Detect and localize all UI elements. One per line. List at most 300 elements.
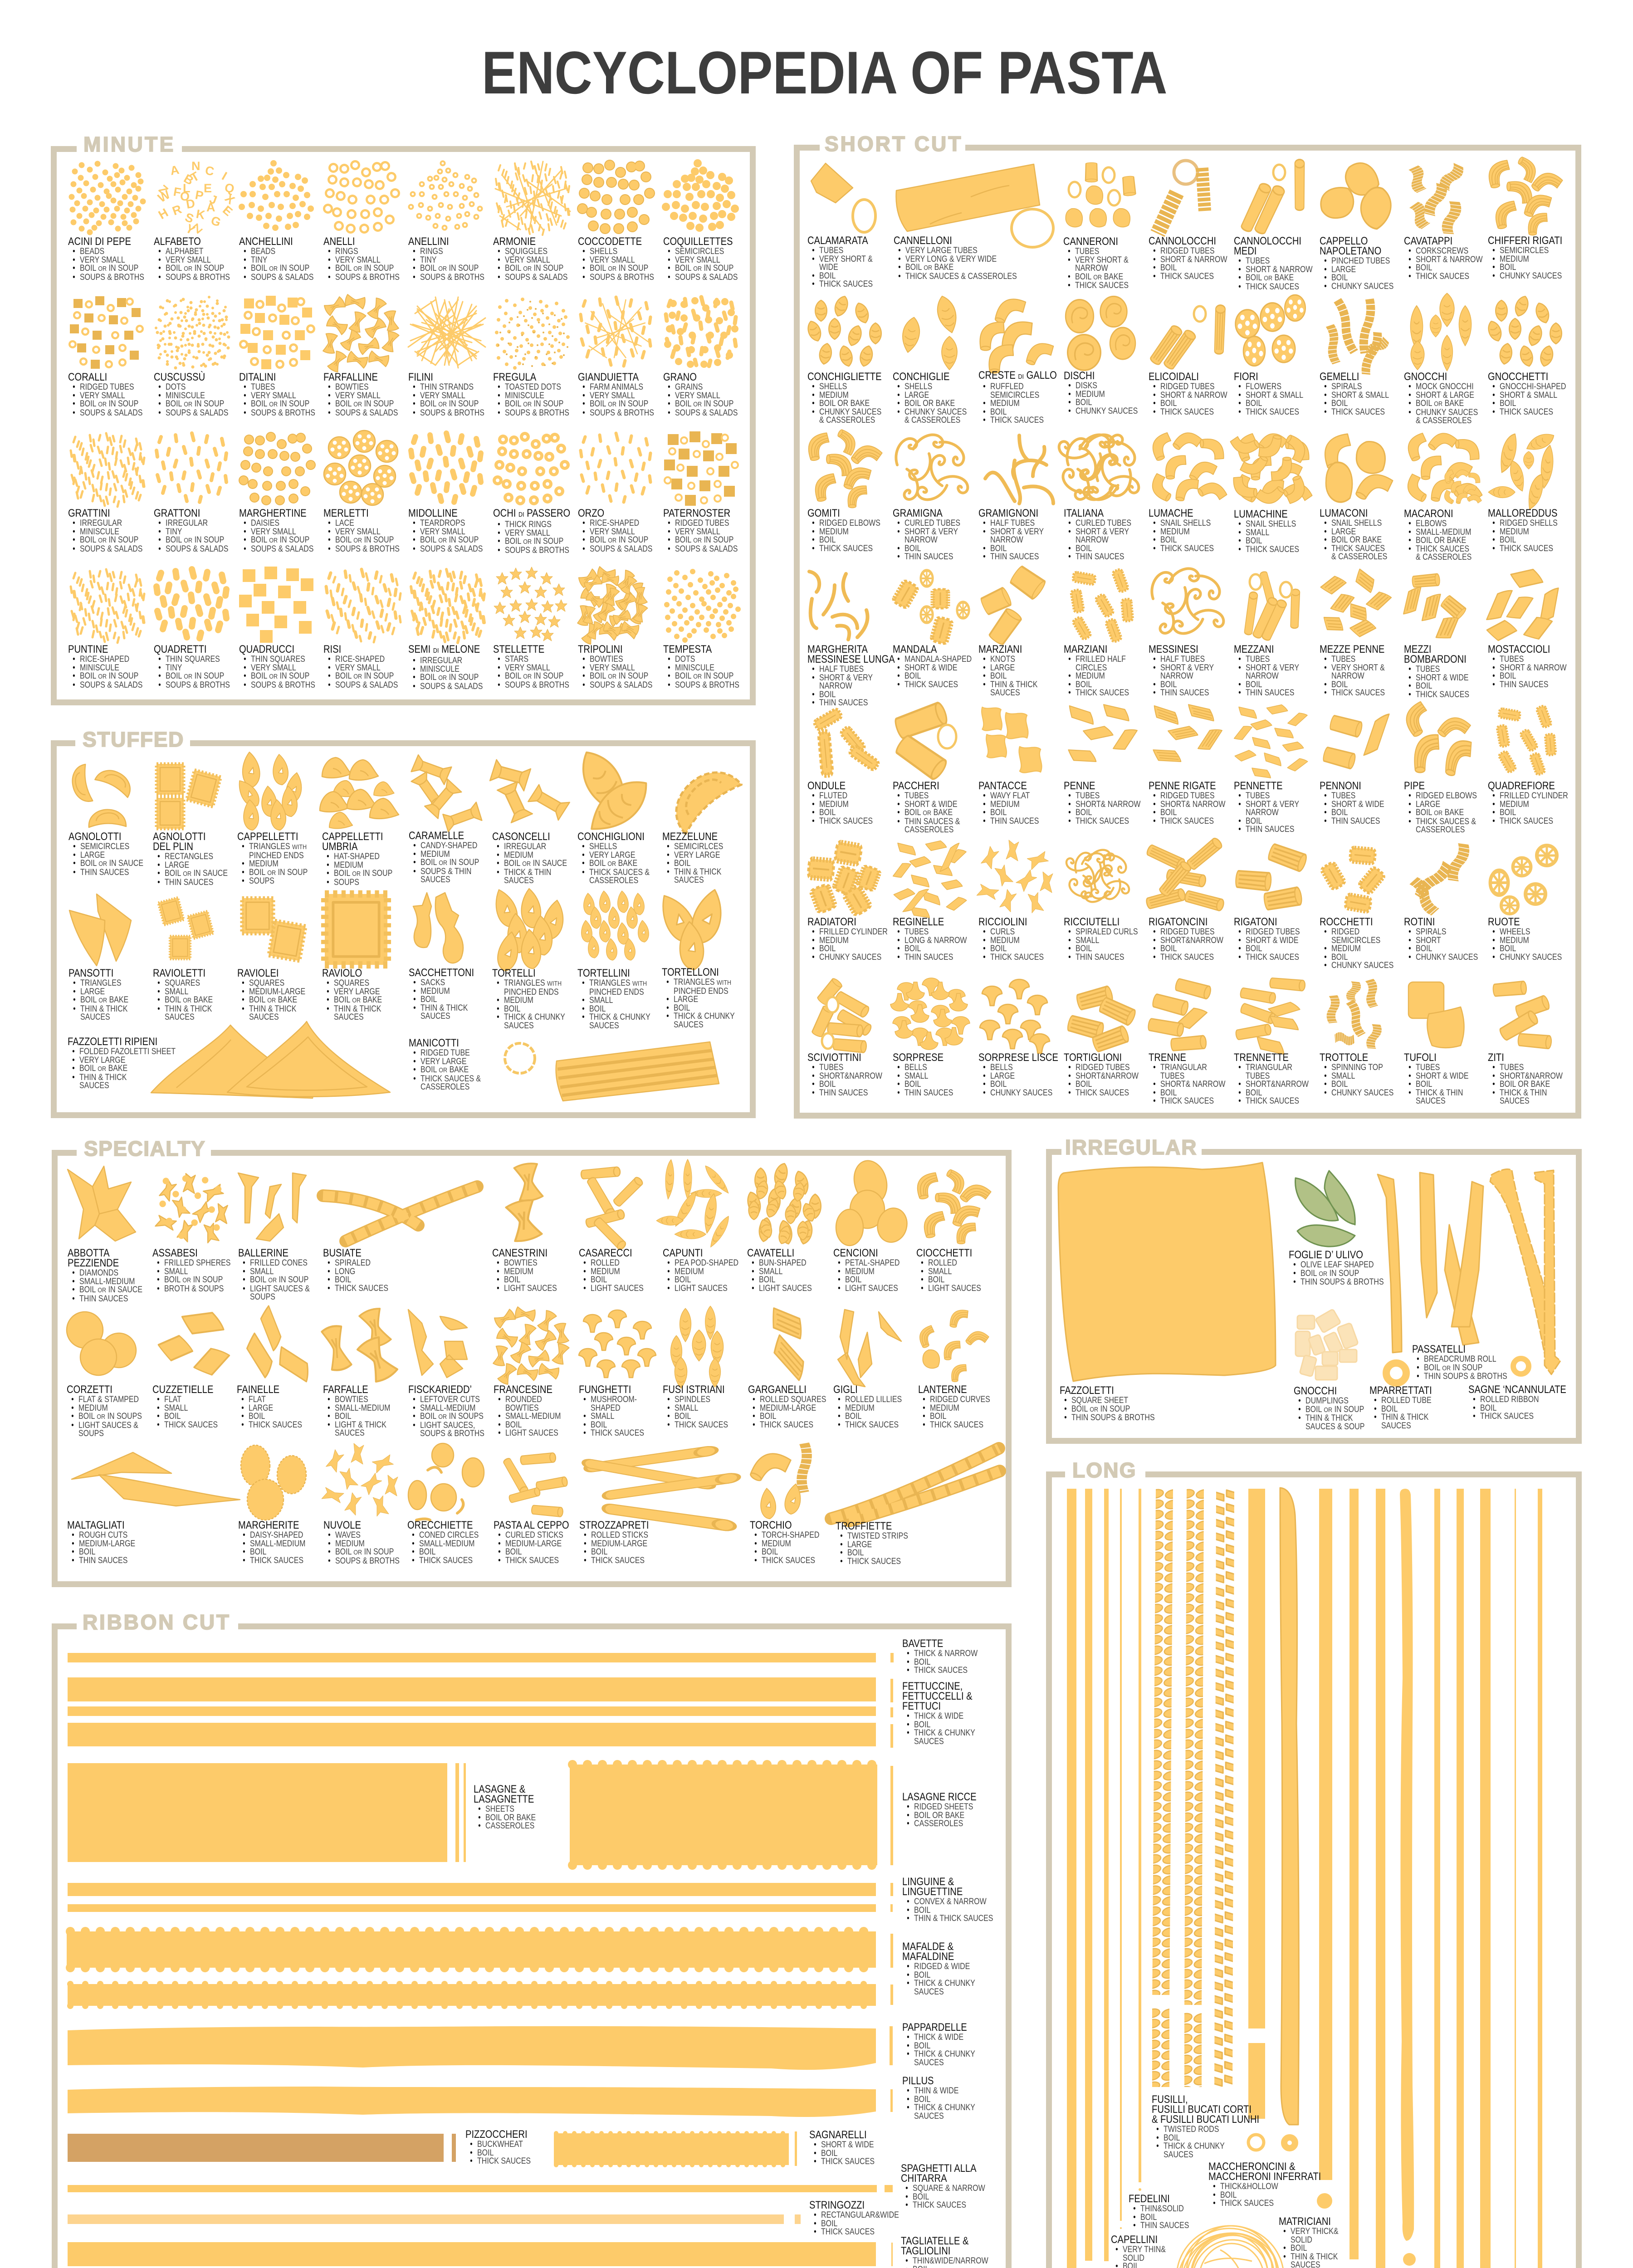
item: strozzapreti: BOIL (591, 1547, 607, 1557)
item: fiori (1234, 297, 1316, 416)
item: anellini (408, 161, 499, 282)
item: trennette: BOIL (1246, 1088, 1262, 1098)
label: mparrettati: MPARRETTATI (1369, 1384, 1432, 1397)
item: corzetti: MEDIUM (78, 1403, 108, 1413)
label: fusilli: TWISTED RODS (1164, 2125, 1219, 2134)
item: chifferi rigati: MEDIUM (1500, 254, 1529, 264)
item: tortelli: MEDIUM (504, 996, 533, 1005)
panel: stuffed (51, 740, 756, 1118)
item: anelli (323, 161, 414, 282)
item: paccheri (893, 706, 973, 835)
item: conchigliette: & CASSEROLES (819, 415, 875, 425)
item: midolline: SOUPS & SALADS (420, 544, 483, 553)
item: ochi di passero: BOIL OR IN SOUP (505, 537, 563, 546)
item: funghetti (579, 1310, 656, 1438)
item: ruote (1488, 842, 1576, 962)
item: ricciolini: MEDIUM (990, 935, 1020, 945)
item: tempesta: BOIL OR IN SOUP (675, 671, 733, 681)
item: ciocchetti: CIOCCHETTI (916, 1247, 972, 1259)
item: margherite: MARGHERITE (238, 1519, 299, 1531)
label: mafalde: THICK & CHUNKY (914, 1979, 975, 1988)
item: rigatoni: RIDGED TUBES (1246, 927, 1300, 937)
item: orecchiette: THICK SAUCES (419, 1556, 473, 1565)
item: gramignoni: THIN SAUCES (990, 552, 1039, 562)
item: canneroni: NARROW (1075, 264, 1108, 273)
item: canestrini: BOIL (504, 1275, 520, 1285)
item: risi: SOUPS & SALADS (335, 680, 398, 689)
item: coccodette: VERY SMALL (590, 255, 635, 265)
label: sagnarelli: BOIL (821, 2148, 837, 2158)
item: caramelle: SOUPS & THIN (420, 866, 471, 876)
item: troffiette: TROFFIETTE (836, 1520, 892, 1532)
item: coralli: VERY SMALL (80, 391, 125, 400)
item: mostaccioli: TUBES (1500, 655, 1524, 664)
item: cannelloni (894, 161, 1040, 281)
item: tripolini (578, 569, 667, 689)
item: gomiti: GOMITI (807, 507, 840, 519)
item: rigatoncini: SHORT&NARROW (1160, 935, 1223, 945)
item: conchigliette: CONCHIGLIETTE (807, 371, 882, 383)
item: fainelle: BOIL (249, 1412, 265, 1421)
panel: irregular (1046, 1149, 1582, 1444)
label: fazzoletti: BOIL OR IN SOUP (1071, 1404, 1130, 1413)
item: quadrucci: BOIL OR IN SOUP (251, 671, 309, 681)
item: cappello napoletano: PINCHED TUBES (1331, 256, 1390, 266)
item: raviolo: THIN & THICK (334, 1004, 381, 1013)
item: tortelloni (662, 892, 748, 1029)
item: armonie: VERY SMALL (505, 255, 550, 265)
label: foglie d'ulivo: BOIL OR IN SOUP (1301, 1268, 1359, 1278)
item: lumaconi (1320, 433, 1400, 562)
item: sorprese lisce: CHUNKY SAUCES (990, 1088, 1052, 1098)
item: lanterne: BOIL (930, 1412, 946, 1421)
item: ruote: RUOTE (1488, 916, 1520, 928)
item: marziani: KNOTS (990, 655, 1015, 664)
item: marziani: THIN & THICK (990, 679, 1037, 689)
item: ruote: MEDIUM (1500, 935, 1529, 945)
item: mandala: MANDALA-SHAPED (905, 655, 972, 664)
item: fazzoletti ripieni: VERY LARGE (79, 1055, 125, 1065)
ribbon: mafalde (67, 1931, 893, 2006)
item: pansotti: PANSOTTI (68, 967, 113, 979)
item: assabesi: BOIL OR IN SOUP (164, 1275, 223, 1285)
item: raviolo (322, 893, 393, 1022)
item: funghetti: FUNGHETTI (579, 1383, 631, 1396)
item: radiatori: BOIL (819, 944, 836, 953)
item: anchellini: ANCHELLINI (239, 235, 293, 248)
item: agnolotti del plin: BOIL OR IN SAUCE (165, 869, 228, 878)
item: fainelle: FAINELLE (237, 1383, 279, 1396)
strand: spaghetti (1456, 1489, 1465, 2268)
item: troffiette (836, 1446, 922, 1566)
item: maltagliati: MALTAGLIATI (67, 1519, 125, 1531)
item: raviolei: SAUCES (249, 1012, 279, 1022)
label: gnocchi: BOIL OR IN SOUP (1305, 1404, 1364, 1414)
item: messinesi: HALF TUBES (1160, 655, 1205, 664)
panel: specialty (52, 1150, 1012, 1587)
item: ditalini: SOUPS & BROTHS (251, 408, 315, 417)
item: trennette: TUBES (1246, 1071, 1270, 1080)
item: ziti: TUBES (1500, 1063, 1524, 1072)
item: cappello napoletano: LARGE (1331, 265, 1356, 274)
item: mezzani: BOIL (1246, 679, 1262, 689)
item: gramigna: SHORT & VERY (905, 527, 958, 536)
item: mandala (893, 569, 987, 689)
item: cannelloni: VERY LONG & VERY WIDE (905, 254, 997, 264)
item: stellette (493, 569, 584, 689)
item: sciviottini: THIN SAUCES (819, 1088, 868, 1098)
item: cappelletti: PINCHED ENDS (249, 851, 304, 860)
label: sagne ncannulate: ROLLED RIBBON (1480, 1395, 1539, 1404)
item: anchellini (239, 161, 328, 282)
item: farfalline: VERY SMALL (335, 391, 381, 400)
item: margherite minute: MARGHERTINE (239, 507, 307, 519)
item: messinesi: SHORT & VERY (1160, 663, 1214, 672)
strand: pellizzoni (1349, 1489, 1359, 2268)
item: lumache: THICK SAUCES (1160, 543, 1214, 553)
item: trennette: TRIANGULAR (1246, 1063, 1292, 1072)
item: manicotti: CASSEROLES (420, 1082, 469, 1092)
strand: vermicelli (1515, 1489, 1516, 2268)
item: maltagliati: ROUGH CUTS (79, 1530, 127, 1540)
item: casoncelli: SAUCES (504, 876, 534, 885)
item: fisckariedd: SOUPS & BROTHS (420, 1429, 484, 1438)
item: tufoli: BOIL (1416, 1080, 1432, 1089)
item: cannolocchi: THICK SAUCES (1160, 271, 1214, 281)
item: cappello napoletano: CHUNKY SAUCES (1331, 281, 1393, 291)
label: lasagne: SHEETS (485, 1804, 514, 1814)
item: mostaccioli: BOIL (1500, 671, 1516, 681)
item: marziani frilled: MEDIUM (1076, 671, 1105, 681)
item: ricciolini: BOIL (990, 944, 1007, 953)
item: gigli: MEDIUM (845, 1403, 875, 1413)
item: gigli: GIGLI (833, 1383, 858, 1396)
label: gnocchi: DUMPLINGS (1305, 1396, 1349, 1406)
item: cavatelli (747, 1173, 824, 1293)
item: tortellini: SAUCES (589, 1021, 619, 1031)
item: puntine: RICE-SHAPED (80, 655, 129, 664)
heading: stuffed: STUFFED (83, 728, 184, 751)
item: grattini (68, 433, 157, 553)
item: garganelli: MEDIUM-LARGE (760, 1403, 816, 1413)
item: canestrini (492, 1173, 569, 1293)
item: stellette: SOUPS & BROTHS (505, 680, 569, 689)
label: tagliatelle: THIN&WIDE/NARROW (913, 2256, 988, 2266)
item: chifferi rigati: CHIFFERI RIGATI (1488, 235, 1562, 247)
item: casarecci: BOIL (591, 1275, 607, 1285)
item: farfalline: FARFALLINE (323, 371, 378, 383)
item: tempesta: TEMPESTA (663, 643, 712, 655)
item: ziti: ZITI (1488, 1051, 1504, 1064)
label: matriciani: MATRICIANI (1279, 2215, 1331, 2228)
item: gomiti: BOIL (819, 535, 836, 545)
label: fettuccine: BOIL (914, 1720, 930, 1729)
item: ricciutelli: THIN SAUCES (1076, 953, 1124, 962)
item: pansotti: TRIANGLES (80, 978, 122, 988)
item: cencioni: PETAL-SHAPED (845, 1258, 900, 1268)
label: fettuccine: SAUCES (914, 1736, 944, 1746)
label: mafalde: MAFALDE & (902, 1941, 953, 1953)
item: anellini: ANELLINI (408, 235, 449, 248)
item: tortellini (577, 893, 664, 1030)
item: ditalini (239, 297, 330, 417)
strand: fedelini (1139, 1489, 1141, 2191)
label: mafalde: MAFALDINE (902, 1950, 954, 1963)
item: caramelle: BOIL OR IN SOUP (420, 858, 479, 867)
item: pipe: PIPE (1404, 780, 1425, 792)
item: elicoidali: THICK SAUCES (1160, 407, 1214, 416)
item: funghetti: SMALL (591, 1412, 614, 1421)
item: assabesi: SMALL (164, 1266, 188, 1276)
label: matriciani: THIN & THICK (1291, 2252, 1338, 2262)
label: pizzoccheri (465, 2130, 543, 2165)
item: anchellini: BEADS (251, 247, 275, 256)
item: messinesi: MESSINESI (1149, 643, 1198, 655)
item: canestrini: MEDIUM (504, 1266, 533, 1276)
item: penne rigate: THICK SAUCES (1160, 816, 1214, 826)
item: quadrefiore: MEDIUM (1500, 799, 1529, 809)
item: tufoli: SHORT & WIDE (1416, 1071, 1469, 1080)
strand: fusilli bucati corti (1184, 1489, 1204, 2087)
item: mezzani (1234, 569, 1311, 698)
item: acini di pepe: VERY SMALL (80, 255, 125, 265)
item: rigatoncini: BOIL (1160, 944, 1177, 953)
item: stellette: STARS (505, 655, 528, 664)
item: marziani frilled: CIRCLES (1076, 663, 1107, 672)
item: italiana: ITALIANA (1064, 507, 1104, 519)
label: pillus: THIN & WIDE (914, 2086, 958, 2096)
item: gramignoni (978, 433, 1056, 562)
item: anelli: VERY SMALL (335, 255, 381, 265)
item: tufoli: SAUCES (1416, 1096, 1446, 1106)
item: lumachine: SMALL (1246, 528, 1269, 537)
item: pennoni (1320, 706, 1397, 826)
item: cappelletti umbria: HAT-SHAPED (334, 852, 380, 861)
item: orzo: VERY SMALL (590, 527, 635, 536)
item: ciocchetti (916, 1173, 993, 1293)
item: tortiglioni: TORTIGLIONI (1064, 1051, 1122, 1064)
item: gnocchi short: MOCK GNOCCHI (1416, 382, 1474, 391)
item: cencioni (833, 1173, 912, 1293)
item: mezzelune: VERY LARGE (674, 850, 720, 860)
item: calamarata: VERY SHORT & (819, 254, 873, 264)
item: rocchetti: MEDIUM (1331, 944, 1361, 953)
item: margherite (238, 1445, 318, 1565)
item: chifferi rigati: SEMICIRCLES (1500, 246, 1549, 255)
item: casoncelli: IRREGULAR (504, 842, 546, 851)
item: ziti (1488, 978, 1577, 1106)
item: pansotti: LARGE (80, 987, 105, 996)
item: sacchettoni: BOIL (420, 995, 437, 1004)
item: mandala: THICK SAUCES (905, 679, 958, 689)
item: ochi di passero (493, 433, 585, 555)
item: pantacce: PANTACCE (978, 780, 1027, 792)
item: dischi: CHUNKY SAUCES (1076, 406, 1138, 415)
item: gnocchetti (1488, 297, 1581, 416)
item: anellini: BOIL OR IN SOUP (420, 264, 479, 273)
item: cavatelli: BOIL (759, 1275, 775, 1285)
item: elicoidali (1149, 297, 1242, 416)
item: nuvole: WAVES (335, 1530, 361, 1540)
item: margherita messinese lunga: MESSINESE LUNGA (807, 653, 895, 665)
item: puntine: MINISCULE (80, 663, 119, 672)
item: tortelli: SAUCES (504, 1021, 534, 1031)
item: tortelloni: TORTELLONI (662, 966, 719, 978)
item: cappelletti umbria: BOIL OR IN SOUP (334, 869, 392, 878)
label: linguine: LINGUINE & (902, 1876, 954, 1888)
item: tufoli: TUFOLI (1404, 1051, 1437, 1064)
item: anelli: BOIL OR IN SOUP (335, 264, 394, 273)
item: merletti: BOIL OR IN SOUP (335, 535, 394, 545)
item: paccheri: TUBES (905, 791, 929, 801)
item: mezze penne: BOIL (1331, 679, 1348, 689)
item: cannolocchi medi: TUBES (1246, 256, 1270, 266)
item: corzetti: BOIL OR IN SOUPS (78, 1412, 142, 1421)
item: coquillettes: VERY SMALL (675, 255, 720, 265)
item: quadretti: THIN SQUARES (166, 655, 220, 664)
pasta: mparrettati tube (1378, 1174, 1406, 1383)
label: lasagne: LASAGNE & (474, 1783, 525, 1795)
label: pappardelle: THICK & WIDE (914, 2033, 963, 2042)
item: elicoidali: ELICOIDALI (1149, 371, 1199, 383)
label: bavette: BOIL (914, 1657, 930, 1667)
item: farfalline: BOIL OR IN SOUP (335, 399, 394, 409)
item: alfabeto: ALPHABET (166, 247, 203, 256)
item: ballerine (238, 1173, 323, 1302)
item: casarecci: LIGHT SAUCES (591, 1284, 644, 1293)
item: cappelletti (237, 757, 321, 885)
label: bavette: BAVETTE (902, 1637, 943, 1650)
item: farfalle (323, 1310, 403, 1438)
item: acini di pepe: BOIL OR IN SOUP (80, 264, 138, 273)
item: margherite minute: SOUPS & SALADS (251, 544, 313, 553)
item: fusi istriani: FUSI ISTRIANI (663, 1383, 725, 1396)
ribbon: sagnarelli (554, 2131, 797, 2166)
item: gramigna: GRAMIGNA (893, 507, 943, 519)
item: penne rigate: SHORT& NARROW (1160, 799, 1225, 809)
item: quadrucci: THIN SQUARES (251, 655, 305, 664)
item: sorprese: SMALL (905, 1071, 928, 1080)
item: torchio: THICK SAUCES (762, 1556, 815, 1565)
item: messinesi (1149, 569, 1226, 698)
item: cannolocchi medi (1234, 161, 1328, 291)
label: lasagne ricce: CASSEROLES (914, 1819, 963, 1828)
item: canestrini: CANESTRINI (492, 1247, 548, 1259)
item: tortelloni: TRIANGLES WITH (674, 978, 731, 987)
item: ravioletti: THIN & THICK (165, 1004, 212, 1013)
item: cannolocchi medi: SHORT & NARROW (1246, 265, 1313, 274)
item: fazzoletti ripieni: FOLDED FAZOLETTI SHEET (79, 1047, 176, 1056)
item: mezzelune: THIN & THICK (674, 867, 721, 876)
item: nuvole: SOUPS & BROTHS (335, 1556, 400, 1566)
item: ricciutelli: SMALL (1076, 935, 1099, 945)
item: ciocchetti: SMALL (928, 1266, 952, 1276)
item: busiate (323, 1173, 401, 1293)
ribbon: pillus (68, 2087, 893, 2117)
item: agnolotti del plin (153, 757, 242, 887)
item: gramignoni: HALF TUBES (990, 518, 1035, 528)
item: agnolotti: BOIL OR IN SAUCE (80, 859, 143, 868)
item: pasta al ceppo: BOIL (505, 1547, 522, 1557)
item: torchio: BOIL (762, 1547, 778, 1557)
item: cencioni: LIGHT SAUCES (845, 1284, 898, 1293)
item: gramigna (893, 433, 973, 562)
item: corzetti: LIGHT SAUCES & (78, 1421, 138, 1430)
item: cuzzetielle: CUZZETIELLE (152, 1383, 213, 1396)
label: stringozzi (809, 2200, 916, 2236)
item: acini di pepe: ACINI DI PEPE (68, 235, 131, 248)
item: marziani: BOIL (990, 671, 1007, 681)
item: risi: BOIL OR IN SOUP (335, 671, 394, 681)
label: lasagne ricce (902, 1792, 991, 1828)
item: cannelloni: BOIL OR BAKE (905, 263, 953, 272)
item: coquillettes (663, 161, 752, 282)
item: margherite: BOIL (250, 1547, 266, 1557)
item: penne (1064, 706, 1155, 826)
item: sorprese lisce: LARGE (990, 1071, 1015, 1080)
item: macaroni (1404, 434, 1485, 562)
item: margherite minute (239, 433, 328, 553)
item: gnocchetti: BOIL (1500, 399, 1516, 408)
item: fazzoletti ripieni (68, 1037, 196, 1090)
item: elicoidali: BOIL (1160, 399, 1177, 408)
item: ballerine: FRILLED CONES (250, 1258, 308, 1268)
label: gnocchi: THIN & THICK (1305, 1413, 1353, 1423)
item: mezze penne: NARROW (1331, 671, 1364, 681)
item: corzetti: CORZETTI (67, 1383, 112, 1396)
item: manicotti (409, 1038, 494, 1091)
item: trottole (1320, 978, 1408, 1097)
item: fisckariedd (408, 1310, 499, 1438)
strand: maccheroni inferrati (1280, 1488, 1299, 2148)
heading: minute: MINUTE (83, 132, 176, 156)
item: pantacce: MEDIUM (990, 799, 1020, 809)
panel: ribbon cut (52, 1623, 1012, 2268)
item: sorprese lisce: SORPRESE LISCE (978, 1051, 1058, 1064)
item: ciocchetti: LIGHT SAUCES (928, 1284, 981, 1293)
item: penne rigate: RIDGED TUBES (1160, 791, 1214, 801)
item: cavatappi: THICK SAUCES (1416, 271, 1469, 281)
item: sorprese lisce: BELLS (990, 1063, 1013, 1072)
item: quadrefiore: BOIL (1500, 808, 1516, 817)
item: fiori: THICK SAUCES (1246, 407, 1299, 416)
item: sorprese lisce (978, 978, 1073, 1097)
label: sagnarelli (809, 2130, 887, 2166)
item: sciviottini: SHORT&NARROW (819, 1071, 882, 1080)
item: puntine: SOUPS & SALADS (80, 680, 142, 689)
item: armonie: SOUPS & SALADS (505, 272, 567, 282)
item: farfalle: SMALL-MEDIUM (335, 1403, 390, 1413)
item: mezzelune: BOIL (674, 859, 690, 868)
item: fusi istriani (663, 1310, 740, 1429)
item: marziani frilled: FRILLED HALF (1076, 655, 1126, 664)
item: nuvole (323, 1445, 414, 1565)
item: grattoni: IRREGULAR (166, 518, 208, 528)
label: fusilli: BOIL (1164, 2133, 1180, 2143)
item: gramignoni: BOIL (990, 543, 1007, 553)
label: gnocchi (1294, 1386, 1378, 1431)
item: manicotti: MANICOTTI (409, 1037, 459, 1049)
item: abbotta pezziende: DIAMONDS (79, 1268, 118, 1278)
heading: long: LONG (1072, 1458, 1137, 1482)
item: ricciolini: THICK SAUCES (990, 953, 1044, 962)
item: penne rigate: BOIL (1160, 808, 1177, 817)
item: gemelli: SHORT & SMALL (1331, 390, 1389, 400)
item: tortelli: TORTELLI (492, 967, 536, 979)
item: marziani frilled: BOIL (1076, 679, 1092, 689)
item: gnocchetti: GNOCCHI-SHAPED (1500, 382, 1566, 391)
item: tortelli: TRIANGLES WITH (504, 978, 562, 988)
